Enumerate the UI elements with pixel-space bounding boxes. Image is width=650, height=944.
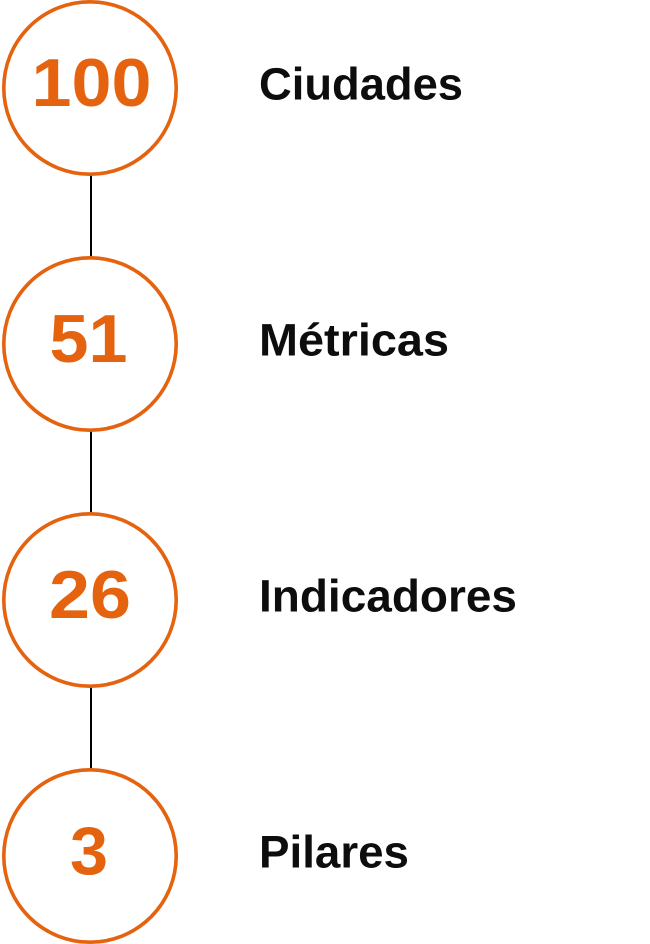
step: 100 Ciudades: Ciudades — [259, 58, 463, 110]
step: 3 Pilares: 3 — [70, 813, 108, 889]
connector: 51 to 26 — [90, 431, 92, 514]
step: 51 Métricas: Métricas — [259, 314, 449, 366]
connector: 26 to 3 — [90, 687, 92, 770]
step: 51 Métricas — [4, 258, 449, 430]
connector: 100 to 51 — [90, 175, 92, 258]
step: 26 Indicadores — [4, 514, 517, 686]
step: 51 Métricas: 51 — [50, 301, 128, 377]
step: 26 Indicadores: 26 — [49, 557, 131, 633]
step: 100 Ciudades: 100 — [32, 45, 152, 121]
step: 100 Ciudades — [4, 2, 463, 174]
step: 3 Pilares: Pilares — [259, 826, 409, 878]
step: 26 Indicadores: Indicadores — [259, 570, 517, 622]
step: 3 Pilares — [4, 770, 409, 942]
